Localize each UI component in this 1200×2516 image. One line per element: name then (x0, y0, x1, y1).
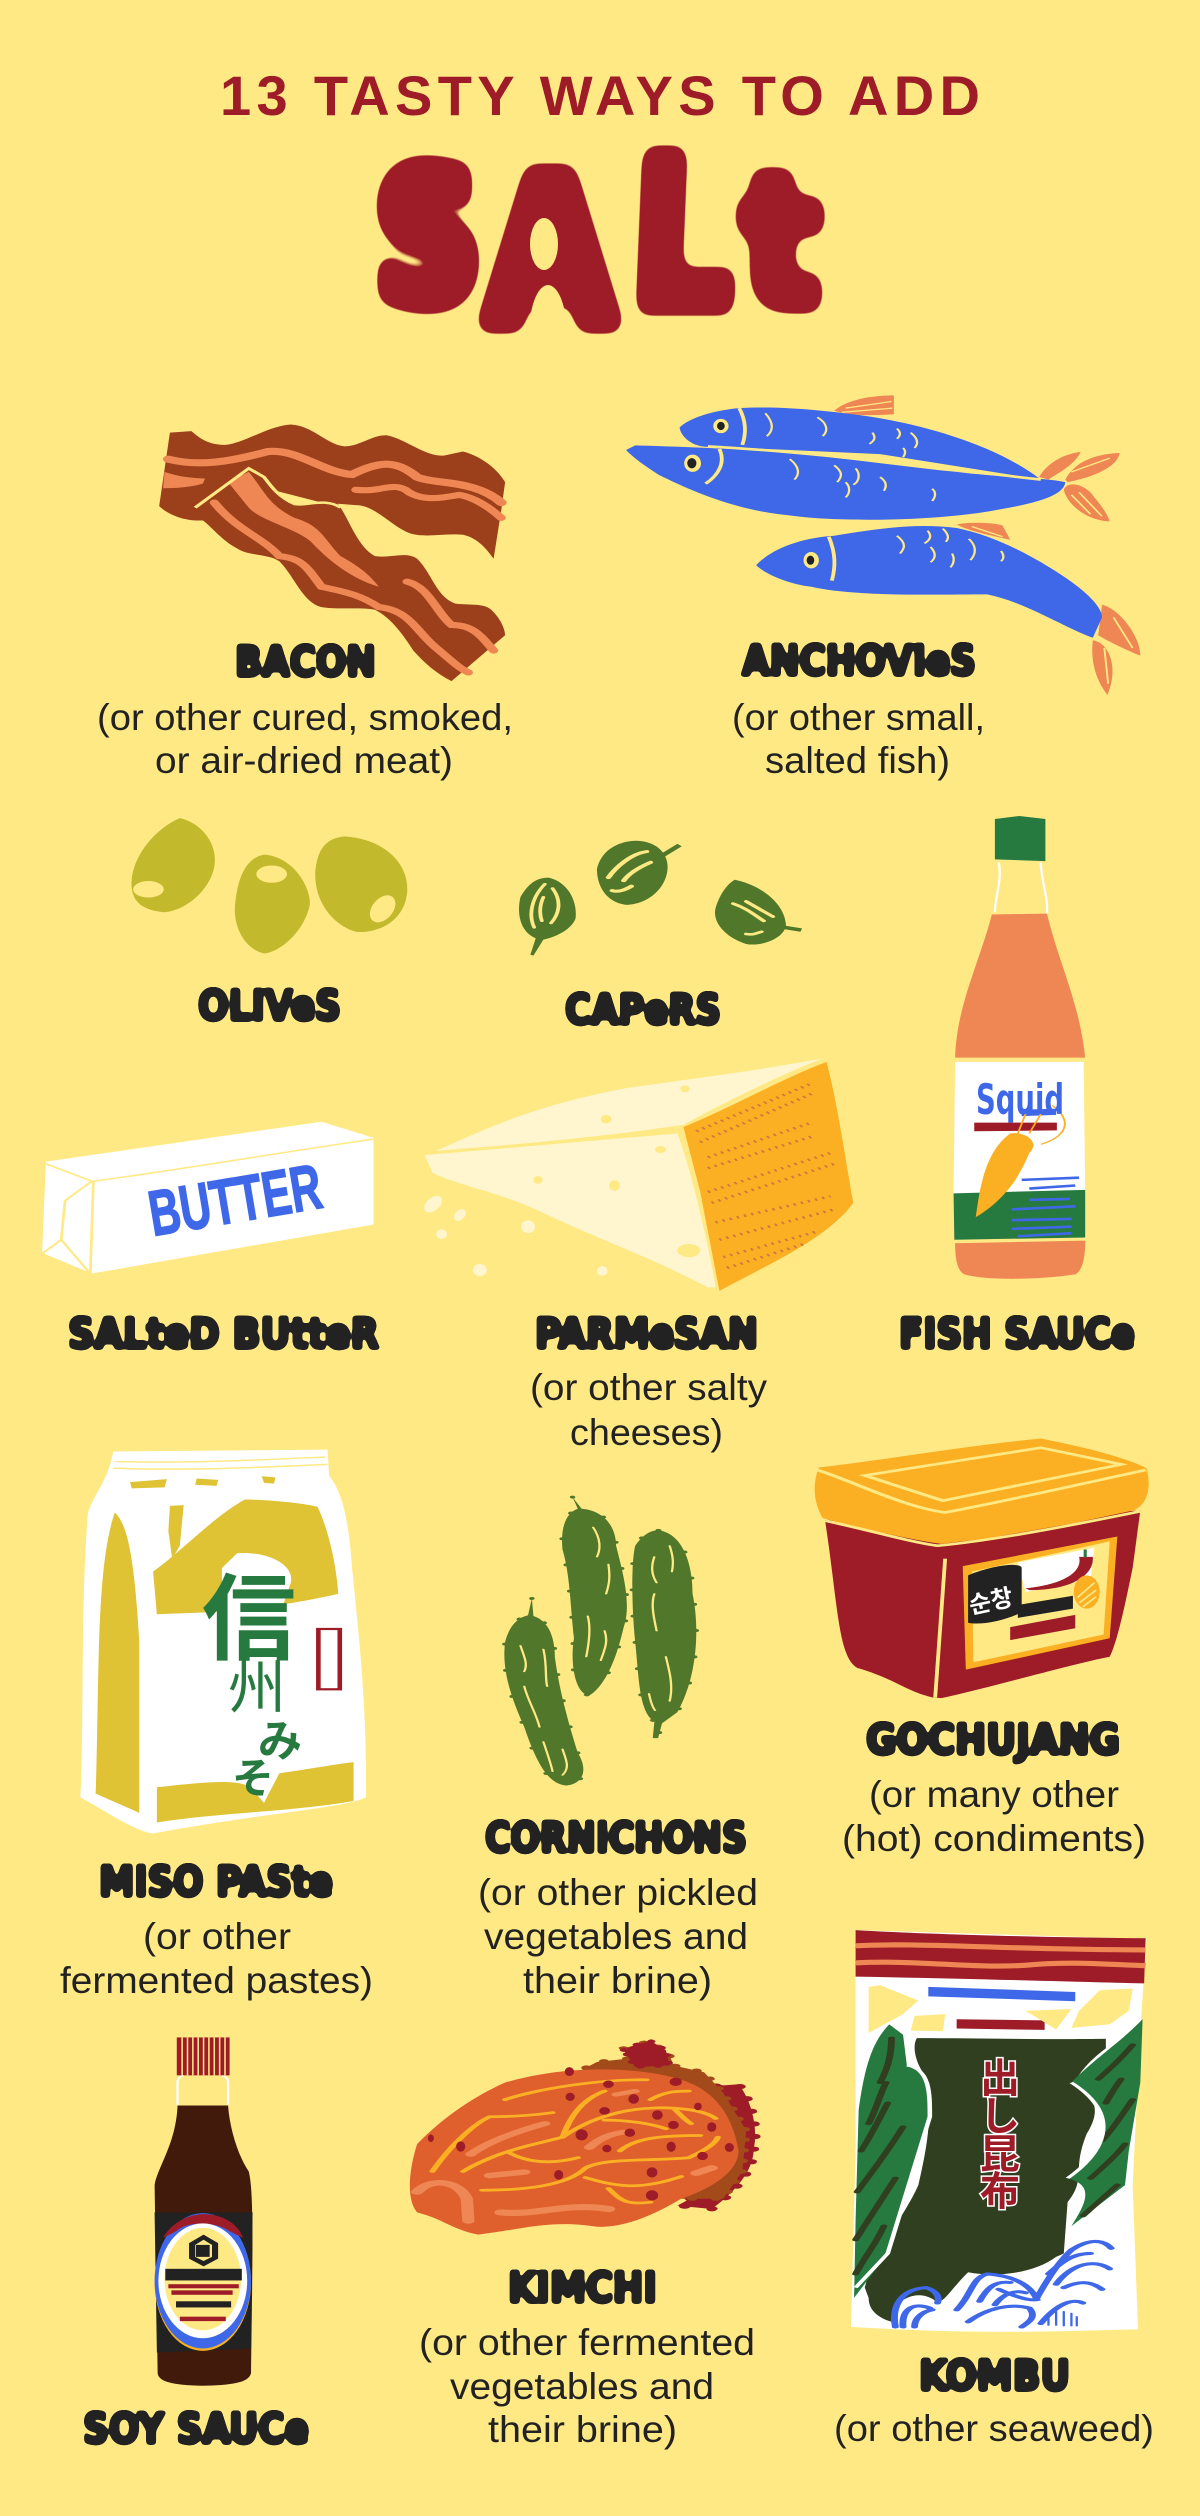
package lettering: 州 (228, 1641, 286, 1725)
description: kimchi: (or other fermented (419, 2322, 755, 2363)
icon: fish sauce bottle (954, 816, 1085, 1279)
description: parmesan (530, 1367, 768, 1453)
description: anchovies: salted fish) (765, 740, 950, 781)
description: miso paste: (or other (143, 1916, 291, 1957)
description: cornichons: vegetables and (484, 1916, 748, 1957)
item: soy sauce (83, 2037, 309, 2453)
item: parmesan (421, 1058, 853, 1453)
icon: olives (131, 818, 407, 953)
package lettering: 布 (980, 2159, 1020, 2217)
icon: kombu package (851, 1930, 1146, 2332)
description: kimchi (419, 2322, 755, 2450)
label: olives: OLIVeS (198, 981, 341, 1030)
label: kombu: KOMBU (919, 2351, 1070, 2400)
item: capers (519, 841, 801, 1034)
title word: salt: L (627, 114, 739, 355)
icon: kimchi (410, 2041, 755, 2235)
description: gochujang: (or many other (869, 1774, 1119, 1815)
description: anchovies: (or other small, (732, 697, 985, 738)
icon: butter stick (42, 1122, 373, 1274)
description: kimchi: vegetables and (450, 2366, 714, 2407)
label: parmesan: PARMeSAN (535, 1309, 758, 1358)
label: gochujang: GOCHUJANG (866, 1715, 1120, 1764)
description: miso paste: fermented pastes) (60, 1960, 373, 2001)
item: gochujang (815, 1438, 1149, 1859)
package lettering: 信 (202, 1544, 296, 1680)
icon: soy sauce bottle (155, 2037, 253, 2386)
description: parmesan: (or other salty (530, 1367, 768, 1408)
label: capers: CAPeRS (565, 985, 721, 1034)
label: kimchi: KIMCHI (508, 2263, 657, 2312)
label: miso paste: MISO PASte (99, 1857, 333, 1906)
icon: miso bag (80, 1450, 366, 1834)
package lettering: 순창 (965, 1577, 1016, 1621)
label: bacon: BACON (235, 637, 376, 686)
item: cornichons (478, 1497, 758, 2001)
label: soy sauce: SOY SAUCe (83, 2404, 309, 2453)
title (220, 64, 980, 385)
title word: salt: S (373, 130, 483, 346)
title word: salt: A (484, 131, 616, 373)
description: bacon: or air-dried meat) (155, 740, 453, 781)
title word: salt: t (742, 136, 820, 347)
icon: bacon (159, 424, 505, 681)
butter wordmark: BUTTER (143, 1150, 327, 1250)
icon: cornichons (504, 1497, 696, 1785)
icon: anchovies (626, 395, 1140, 695)
item: olives (131, 818, 407, 1030)
icon: gochujang tub (815, 1438, 1149, 1698)
title word: salt (373, 114, 820, 385)
label: anchovies: ANCHOVIeS (742, 636, 976, 685)
label: fish sauce: FISH SAUCe (899, 1309, 1135, 1358)
package lettering: み (258, 1705, 302, 1769)
description: cornichons (478, 1872, 758, 2001)
package lettering: 出 (980, 2046, 1020, 2104)
icon: parmesan wedge (421, 1058, 853, 1291)
description: miso paste (60, 1916, 373, 2001)
description: anchovies (732, 697, 985, 781)
label: salted butter: SALteD BUtteR (68, 1309, 379, 1358)
description: kimchi: their brine) (488, 2409, 677, 2450)
package lettering (202, 1544, 302, 1806)
item: kombu (834, 1930, 1154, 2449)
title line: 13 TASTY WAYS TO ADD (220, 64, 980, 127)
description: parmesan: cheeses) (570, 1412, 723, 1453)
item: anchovies (626, 395, 1140, 781)
bottle brand: Squid (976, 1075, 1064, 1124)
item: salted butter (42, 1122, 379, 1358)
description: cornichons: their brine) (523, 1960, 712, 2001)
icon: capers (519, 841, 801, 956)
description: gochujang: (hot) condiments) (842, 1818, 1146, 1859)
package lettering (980, 2046, 1020, 2217)
item: fish sauce (899, 816, 1135, 1358)
description: cornichons: (or other pickled (478, 1872, 758, 1913)
label: cornichons: CORNICHONS (485, 1813, 747, 1862)
item: kimchi (410, 2041, 755, 2450)
description: kombu: (or other seaweed) (834, 2408, 1154, 2449)
package lettering: そ (232, 1745, 274, 1806)
description: bacon: (or other cured, smoked, (97, 697, 513, 738)
description: bacon (97, 697, 513, 781)
package lettering: 昆 (980, 2122, 1020, 2180)
description: gochujang (842, 1774, 1146, 1859)
item: bacon (97, 424, 513, 781)
item: miso paste (60, 1450, 373, 2001)
package lettering: し (980, 2084, 1020, 2142)
